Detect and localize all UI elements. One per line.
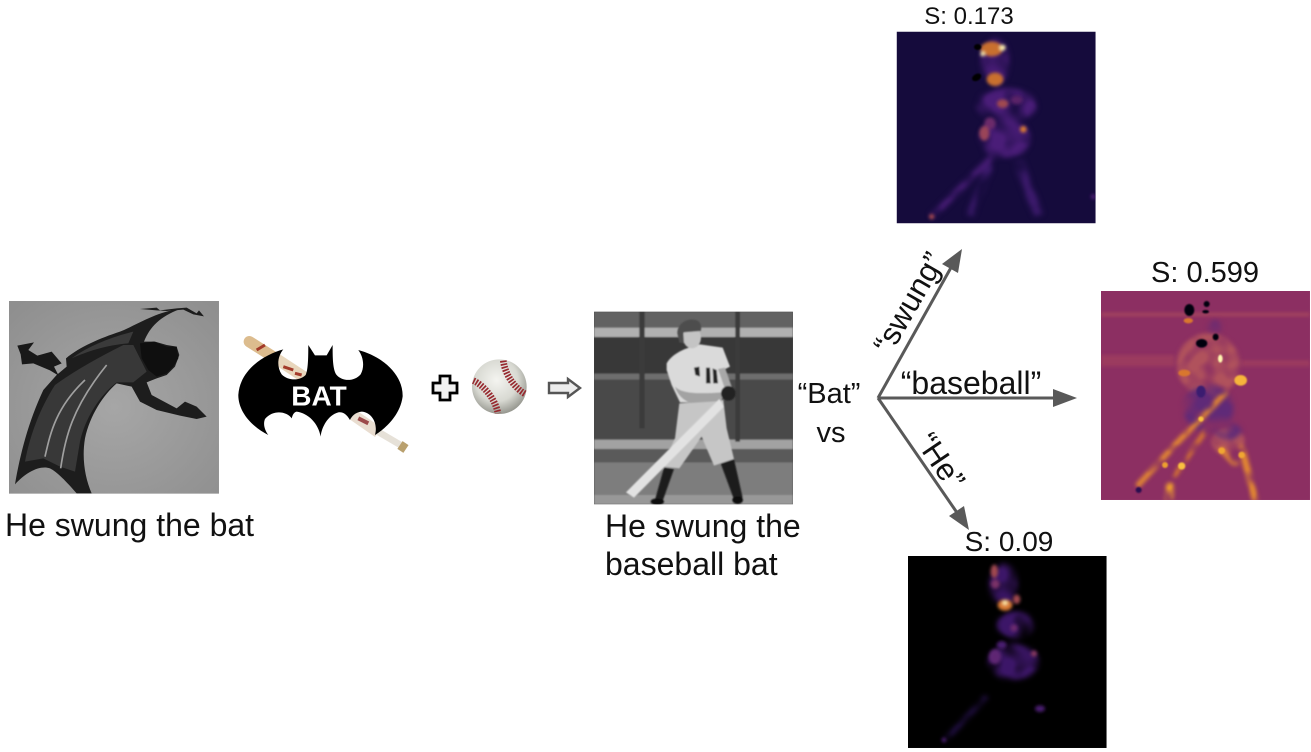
heatmap: swung — [897, 32, 1096, 223]
arrow label: swung: “swung” — [866, 246, 952, 359]
background bands — [1101, 312, 1310, 366]
diffuse body glow — [945, 563, 1038, 740]
bright traces — [1138, 393, 1255, 498]
creature body — [25, 345, 147, 472]
score: He: S: 0.09 — [965, 526, 1053, 557]
score: baseball: S: 0.599 — [1151, 257, 1259, 289]
creature wing — [15, 309, 207, 493]
label: Bat vs: vs — [816, 417, 846, 449]
diffuse body glow — [932, 38, 1038, 217]
arrow label: He: “He” — [909, 426, 972, 496]
heatmap: baseball — [1101, 291, 1310, 500]
creature head — [140, 342, 178, 377]
icon: plus sign — [433, 376, 457, 400]
arrow: to He heatmap — [878, 398, 969, 530]
creature upper wing membrane — [72, 332, 133, 358]
creature leg — [17, 342, 62, 376]
caption: original sentence: He swung the bat — [5, 507, 254, 543]
panel: bat creature image — [9, 301, 219, 494]
logo label: BAT — [291, 380, 347, 411]
panel: baseball player image — [594, 312, 793, 505]
caption: disambiguated sentence: baseball bat — [605, 546, 778, 582]
dark spots — [971, 44, 983, 83]
hot spots — [942, 565, 1045, 742]
icon: baseball — [472, 359, 527, 414]
creature highlights — [45, 365, 107, 468]
caption: disambiguated sentence: He swung the — [605, 508, 801, 544]
score: swung: S: 0.173 — [924, 3, 1014, 30]
batman silhouette — [238, 345, 403, 437]
photo background — [594, 312, 793, 504]
arrow label: baseball: “baseball” — [901, 365, 1041, 401]
icon: batman logo with baseball bat — [238, 342, 406, 449]
bright spots — [1162, 318, 1247, 470]
arrow: to baseball heatmap — [878, 389, 1077, 407]
body texture — [1177, 333, 1245, 455]
dark spots — [1136, 301, 1219, 493]
bat lower-right — [353, 415, 406, 449]
icon: hollow arrow — [549, 379, 580, 397]
hot spots — [929, 42, 1096, 219]
player — [626, 319, 743, 505]
creature tail — [140, 308, 204, 316]
label: Bat vs: “Bat” — [798, 378, 860, 410]
heatmap: He — [908, 556, 1107, 748]
bat handle upper-left — [249, 342, 305, 378]
arrow: to swung heatmap — [878, 249, 962, 398]
